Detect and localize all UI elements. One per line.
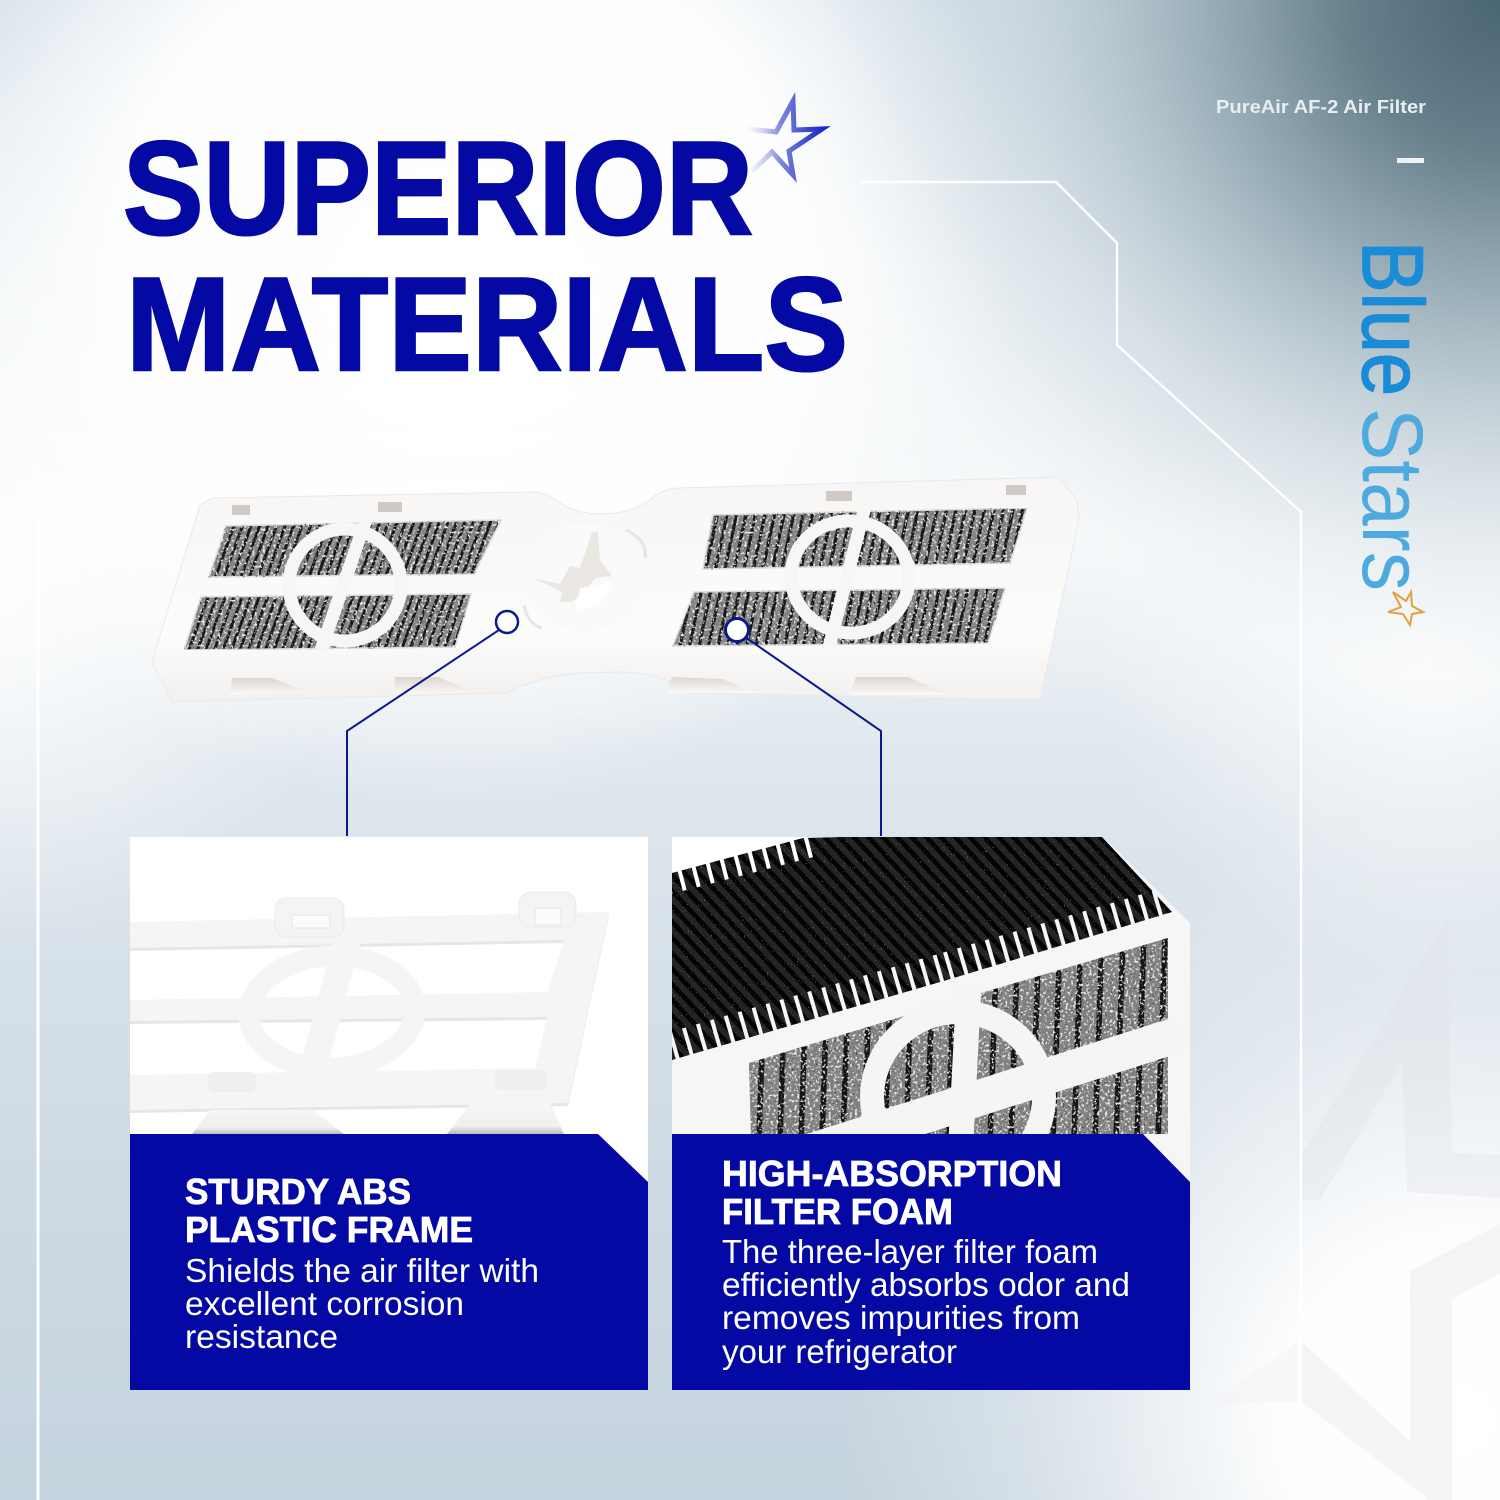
caption box <box>672 1134 1190 1390</box>
left ring <box>280 517 410 650</box>
caption body: The three-layer filter foam <box>722 1233 1098 1270</box>
panel: ABS plastic frame <box>130 837 648 1390</box>
caption body: efficiently absorbs odor and <box>722 1266 1130 1303</box>
right ring <box>782 503 918 647</box>
icon: logo star <box>1388 592 1423 625</box>
product name: PureAir AF-2 Air Filter <box>1216 96 1426 117</box>
closeup: plastic frame <box>130 892 609 1134</box>
caption body: Shields the air filter with <box>185 1252 539 1289</box>
caption heading: STURDY ABS <box>185 1171 411 1212</box>
marker: filter foam <box>726 618 748 642</box>
caption box <box>130 1134 648 1390</box>
frame slots <box>232 485 1026 515</box>
bottom notches <box>230 677 948 695</box>
closeup: pleated filter <box>672 837 1172 1134</box>
leader line: filter foam <box>745 637 881 836</box>
caption heading: PLASTIC FRAME <box>185 1209 473 1250</box>
brand logo: BlueStars: Blue <box>1344 241 1440 396</box>
caption body: your refrigerator <box>722 1333 957 1370</box>
panel: high-absorption filter foam <box>666 837 1190 1390</box>
foam texture <box>749 938 1168 1140</box>
brand logo: BlueStars: Stars <box>1344 408 1440 591</box>
caption heading: HIGH-ABSORPTION <box>722 1153 1062 1194</box>
product photo: air filter <box>152 477 1079 702</box>
title: SUPERIOR <box>123 115 753 263</box>
filter windows <box>184 508 1027 650</box>
title <box>123 115 848 399</box>
filter frame <box>152 477 1079 702</box>
brand logo: BlueStars <box>1344 241 1440 625</box>
caption body: resistance <box>185 1318 338 1355</box>
caption heading <box>722 1153 1062 1232</box>
caption body: excellent corrosion <box>185 1285 464 1322</box>
caption heading: FILTER FOAM <box>722 1191 953 1232</box>
charcoal pleats <box>672 837 1172 1060</box>
marker: frame <box>496 611 518 633</box>
icon: title star <box>748 101 822 175</box>
caption heading <box>185 1171 473 1250</box>
caption body: removes impurities from <box>722 1299 1080 1336</box>
caption body <box>722 1233 1130 1370</box>
center hub <box>524 524 645 632</box>
dash <box>1397 158 1424 163</box>
leader line: frame <box>347 630 499 836</box>
frame bars and ring <box>806 993 1168 1134</box>
title: MATERIALS <box>126 251 848 399</box>
caption body <box>185 1252 539 1355</box>
